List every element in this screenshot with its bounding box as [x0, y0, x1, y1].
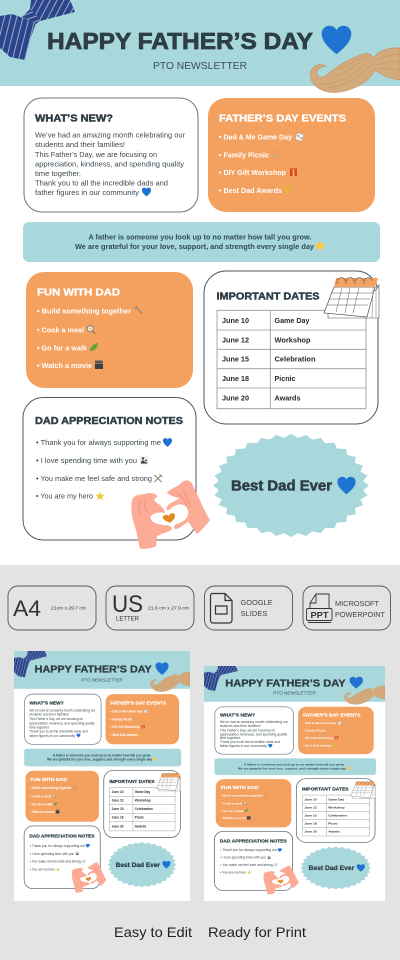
preview: US letter poster: • DIY Gift Workshop: [303, 736, 333, 740]
badge: best dad ever: Best Dad Ever: [231, 478, 332, 494]
preview: US letter poster: FUN WITH DAD: [221, 785, 258, 790]
preview: A4 poster: • Watch a movie: [30, 810, 55, 814]
preview: US letter poster: Thank you to all the incredible dads and: [220, 740, 280, 744]
preview: A4 poster: • DIY Gift Workshop: [110, 725, 140, 729]
panel: fun with dad: • Cook a meal: [37, 326, 84, 334]
preview: A4 poster: • You make me feel safe and strong: [30, 860, 81, 864]
preview: US letter poster: • Build something together: [221, 794, 264, 797]
preview: A4 poster: June 15: [112, 807, 124, 811]
panel: dad appreciation notes: [23, 398, 196, 540]
preview: A4 poster: June 10: [112, 790, 124, 794]
preview: US letter poster: June 20: [304, 830, 317, 834]
preview: A4 poster: This Father’s Day, we are focusing on: [29, 717, 83, 721]
preview: A4 poster: Picnic: [135, 816, 144, 820]
preview: A4 poster: appreciation, kindness, and spending quality: [29, 721, 95, 725]
preview: A4 poster: • Go for a walk: [30, 802, 52, 806]
format card: US letter: 21.6 cm x 27.9 cm: [148, 606, 189, 610]
preview: A4 poster: HAPPY FATHER’S DAY: [35, 665, 152, 676]
panel: what's new: students and their families!: [35, 140, 125, 149]
preview: US letter poster: WHAT’S NEW?: [220, 713, 255, 717]
format card: A4: [8, 586, 96, 630]
format card: A4: A4: [13, 596, 41, 621]
preview: US letter poster: students and their families!: [220, 724, 261, 728]
preview: US letter poster: • Best Dad Awards: [303, 743, 332, 747]
preview: US letter poster: • Thank you for always supporting me: [220, 848, 277, 852]
format card: US letter: LETTER: [116, 616, 140, 622]
preview: A4 poster: • Cook a meal: [30, 794, 51, 798]
preview: A4 poster: • Best Dad Awards: [110, 733, 138, 737]
panel: dad appreciation notes: • You are my hero: [36, 492, 93, 500]
preview: A4 poster: Game Day: [135, 790, 150, 794]
preview: A4 poster: June 20: [112, 824, 124, 828]
table: dates: June 12: [222, 336, 249, 344]
preview: US letter poster: appreciation, kindness, and spending quality: [220, 732, 288, 736]
preview: A4 poster: DAD APPRECIATION NOTES: [29, 834, 95, 839]
preview: A4 poster: June 18: [112, 816, 124, 820]
table: dates: [217, 310, 366, 409]
banner: quote: A father is someone you look up to no matter how tall you grow.: [88, 232, 312, 242]
preview: A4 poster: Awards: [135, 824, 146, 828]
preview: US letter poster: time together.: [220, 736, 241, 740]
preview: A4 poster: We are grateful for your love, support, and strength every single day: [47, 758, 152, 762]
panel: dad appreciation notes: • I love spending time with you: [36, 456, 137, 465]
preview: A4 poster: • Dad & Me Game Day: [110, 709, 143, 713]
preview: US letter poster: Celebration: [328, 813, 347, 817]
badge: best dad ever: [213, 434, 369, 537]
preview: US letter poster: IMPORTANT DATES: [302, 787, 349, 792]
format card: PowerPoint: POWERPOINT: [335, 610, 385, 619]
table: dates: Workshop: [274, 336, 311, 344]
panel: fun with dad: [26, 272, 193, 388]
table: dates: Celebration: [274, 354, 316, 364]
panel: father's day events: • Family Picnic: [219, 150, 269, 160]
preview: US letter poster: • Watch a movie: [221, 816, 246, 820]
preview: US letter poster: • I love spending time with you: [220, 856, 266, 860]
table: dates: June 18: [222, 374, 249, 383]
preview: A4 poster: Celebration: [135, 807, 153, 811]
icon: slides document: [210, 594, 232, 623]
icon: heart hands: [131, 480, 210, 549]
table: dates: June 15: [222, 354, 249, 364]
format card: Google Slides: SLIDES: [240, 609, 268, 618]
preview: US letter poster: June 15: [304, 813, 317, 817]
preview: US letter poster: Picnic: [328, 822, 338, 825]
format card: US letter: US: [112, 591, 143, 618]
preview: US letter poster: HAPPY FATHER’S DAY: [225, 679, 346, 689]
preview: US letter poster: Workshop: [328, 806, 345, 809]
caption: easy to edit: Easy to Edit: [114, 924, 192, 940]
panel: father's day events: • Best Dad Awards: [219, 186, 282, 195]
poster: full newsletter: [0, 0, 400, 565]
preview: US letter poster: [204, 666, 385, 901]
panel: important dates: [204, 271, 379, 424]
panel: what's new: father figures in our community: [35, 188, 139, 197]
icon: blue heart: [322, 26, 351, 54]
icon: calendar: [324, 278, 379, 318]
panel: what's new: This Father’s Day, we are focusing on: [35, 150, 157, 159]
preview: US letter poster: This Father’s Day, we are focusing on: [220, 728, 275, 732]
panel: father's day events: [208, 98, 375, 212]
preview: US letter poster: We’ve had an amazing month celebrating our: [220, 720, 289, 724]
preview: A4 poster: • You are my hero: [30, 867, 55, 871]
preview: US letter poster: • Cook a meal: [221, 801, 242, 805]
table: dates: June 20: [222, 394, 249, 402]
format card: PowerPoint: [303, 586, 390, 630]
preview: A4 poster: students and their families!: [29, 713, 69, 717]
preview: US letter poster: June 12: [304, 806, 317, 809]
preview: A4 poster: • Family Picnic: [110, 717, 133, 721]
preview: A4 poster: time together.: [29, 725, 50, 729]
preview: A4 poster: June 12: [112, 799, 124, 803]
panel: fun with dad: • Watch a movie: [37, 361, 92, 370]
preview: US letter poster: June 18: [304, 822, 317, 825]
table: dates: Picnic: [274, 374, 296, 383]
preview: US letter poster: • You make me feel safe and strong: [220, 863, 273, 867]
preview: US letter poster: FATHER’S DAY EVENTS: [303, 713, 361, 717]
preview: A4 poster: PTO NEWSLETTER: [81, 677, 123, 682]
subtitle: PTO NEWSLETTER: [153, 60, 247, 72]
panel: dad appreciation notes: DAD APPRECIATION NOTES: [35, 416, 183, 427]
preview: A4 poster: Best Dad Ever: [116, 862, 161, 869]
preview: US letter poster: Best Dad Ever: [309, 865, 355, 872]
panel: dad appreciation notes: • Thank you for always supporting me: [36, 438, 161, 447]
preview: A4 poster: • Thank you for always supporting me: [30, 844, 85, 848]
banner: quote: [23, 222, 380, 262]
preview: US letter poster: A father is someone you look up to no matter how tall you grow.: [244, 763, 345, 767]
format card: US letter: [106, 586, 194, 630]
panel: what's new: [24, 98, 198, 212]
panel: what's new: We’ve had an amazing month celebrating our: [35, 130, 185, 140]
preview: A4 poster: [14, 651, 190, 901]
preview: US letter poster: Game Day: [328, 797, 344, 801]
preview: US letter poster: Awards: [328, 830, 340, 834]
icon: bow tie: [0, 0, 75, 60]
table: dates: June 10: [222, 316, 249, 325]
banner: quote: We are grateful for your love, support, and strength every single day: [75, 242, 315, 251]
preview: US letter poster: June 10: [304, 797, 317, 801]
preview: A4 poster: We’ve had an amazing month celebrating our: [29, 709, 96, 713]
preview: US letter poster: • Family Picnic: [303, 729, 326, 732]
preview: US letter poster: father figures in our community: [220, 744, 267, 748]
preview: A4 poster: IMPORTANT DATES: [109, 779, 155, 784]
preview: US letter poster: • You are my hero: [220, 870, 246, 874]
preview: A4 poster: • Build something together: [30, 786, 72, 790]
preview: A4 poster: Workshop: [135, 799, 151, 803]
format card: A4: 21cm x 29.7 cm: [51, 606, 86, 610]
panel: fun with dad: FUN WITH DAD: [37, 288, 120, 298]
preview: US letter poster: • Dad & Me Game Day: [303, 721, 336, 725]
panel: father's day events: • DIY Gift Workshop: [219, 168, 286, 177]
preview: US letter poster: We are grateful for your love, support, and strength every single day: [238, 767, 346, 771]
panel: what's new: time together.: [35, 169, 81, 178]
header band: [0, 0, 400, 86]
panel: important dates: IMPORTANT DATES: [216, 292, 320, 302]
panel: fun with dad: • Go for a walk: [37, 344, 88, 352]
icon: PPT file: PPT: [310, 610, 329, 620]
panel: what's new: Thank you to all the incredible dads and: [35, 178, 168, 188]
panel: what's new: WHAT’S NEW?: [35, 114, 113, 124]
panel: what's new: appreciation, kindness, and spending quality: [35, 160, 184, 168]
preview: A4 poster: father figures in our community: [29, 734, 75, 738]
table: dates: Awards: [274, 394, 300, 402]
preview: A4 poster: Thank you to all the incredible dads and: [29, 730, 88, 734]
title: HAPPY FATHER’S DAY: [47, 28, 313, 54]
preview: A4 poster: WHAT’S NEW?: [29, 700, 64, 705]
preview: A4 poster: FUN WITH DAD: [30, 777, 68, 782]
panel: dad appreciation notes: • You make me feel safe and strong: [36, 474, 152, 483]
panel: father's day events: FATHER’S DAY EVENTS: [219, 114, 346, 124]
preview: US letter poster: • Go for a walk: [221, 809, 244, 813]
preview: A4 poster: FATHER’S DAY EVENTS: [110, 700, 166, 705]
preview: US letter poster: DAD APPRECIATION NOTES: [220, 839, 287, 843]
icon: mustache: [310, 48, 400, 92]
preview: A4 poster: • I love spending time with you: [30, 852, 74, 856]
format card: PowerPoint: MICROSOFT: [335, 599, 379, 608]
table: dates: Game Day: [274, 316, 310, 325]
format card: Google Slides: [204, 586, 292, 630]
preview: US letter poster: PTO NEWSLETTER: [273, 691, 316, 696]
panel: fun with dad: • Build something together: [37, 306, 131, 316]
caption: ready for print: Ready for Print: [208, 924, 306, 940]
format card: Google Slides: GOOGLE: [240, 598, 273, 607]
panel: father's day events: • Dad & Me Game Day: [219, 132, 293, 142]
preview: A4 poster: A father is someone you look up to no matter how tall you grow.: [53, 753, 151, 757]
